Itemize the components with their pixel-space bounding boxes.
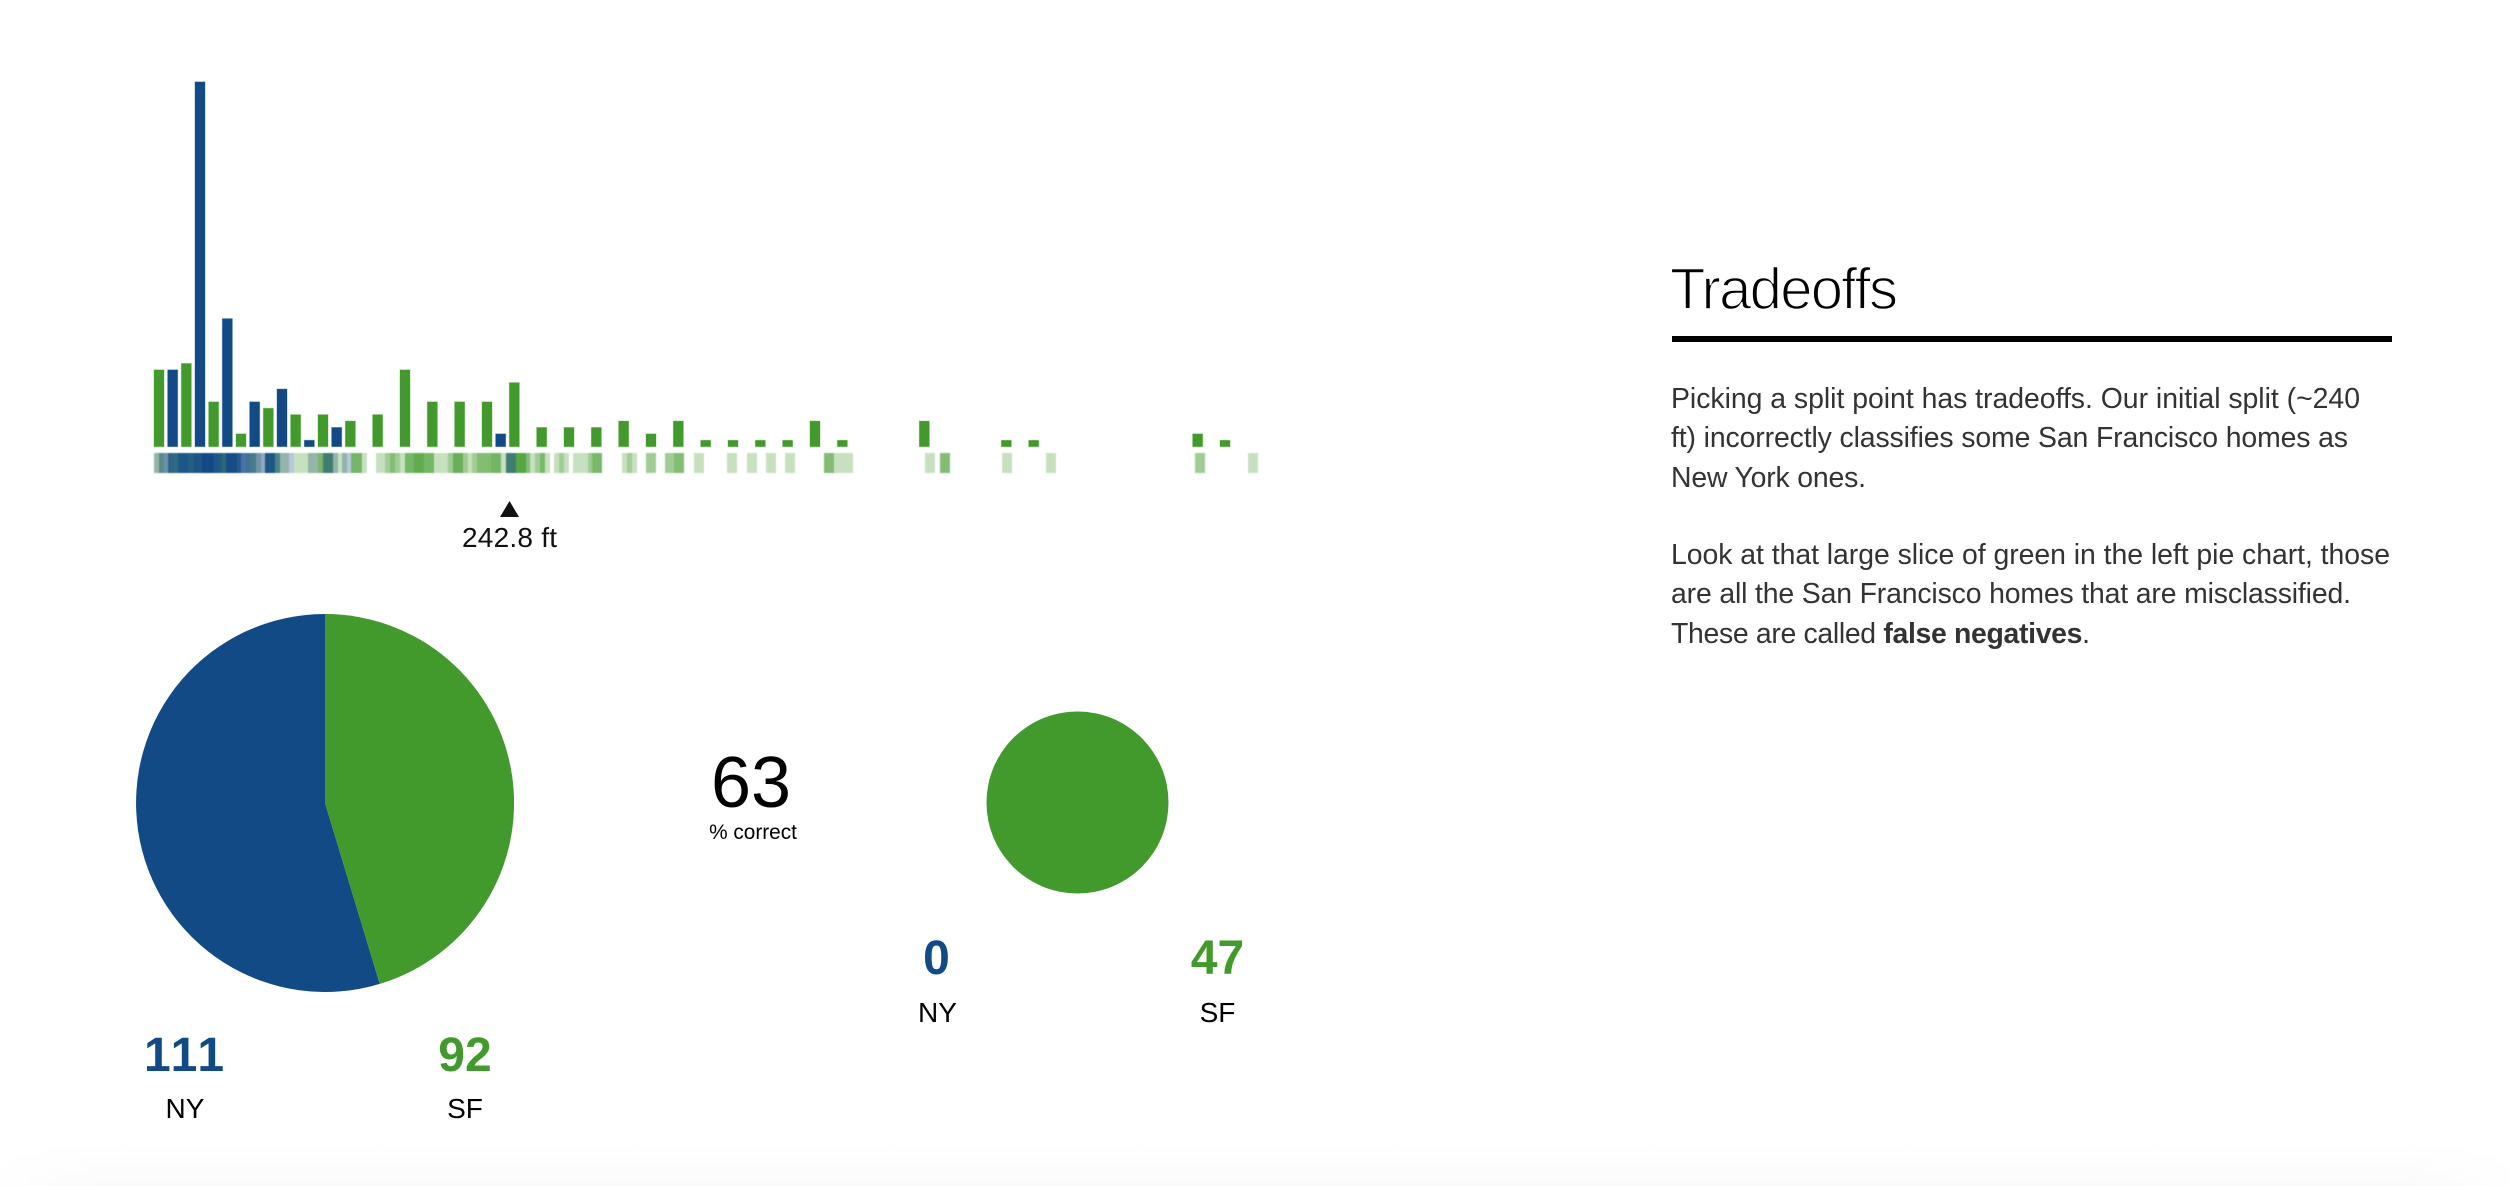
paragraph two xyxy=(1671,539,2390,650)
paragraph one: ft) incorrectly classifies some San Francisco homes as xyxy=(1671,422,2348,454)
histogram bars: homes by elevation xyxy=(154,82,1230,447)
right pie counts xyxy=(918,932,1244,1028)
NY label: NY xyxy=(918,997,957,1028)
paragraph one: New York ones. xyxy=(1671,462,1866,494)
strip plot: individual homes along elevation axis xyxy=(154,453,1258,473)
title rule xyxy=(1672,336,2392,342)
left pie counts xyxy=(144,1029,492,1124)
paragraph one: Picking a split point has tradeoffs. Our initial split (~240 xyxy=(1671,383,2360,415)
SF label: SF xyxy=(447,1093,483,1124)
paragraph two: These are called false negatives. xyxy=(1671,618,2090,650)
text block: explanation xyxy=(1671,383,2390,650)
paragraph two: are all the San Francisco homes that are misclassified. xyxy=(1671,578,2351,610)
right pie chart: above split xyxy=(986,712,1168,894)
SF count: 47 xyxy=(1191,932,1244,985)
SF label: SF xyxy=(1200,997,1235,1028)
title: Tradeoffs xyxy=(1670,257,1898,322)
accuracy readout xyxy=(709,743,797,844)
NY label: NY xyxy=(166,1093,205,1124)
NY count: 0 xyxy=(923,932,950,985)
accuracy value: 63 xyxy=(711,743,791,823)
NY count: 111 xyxy=(144,1029,224,1082)
SF count: 92 xyxy=(438,1029,492,1082)
accuracy caption: % correct xyxy=(709,821,797,844)
left pie chart: below split xyxy=(136,614,514,992)
split point marker xyxy=(462,501,557,553)
split point value: 242.8 ft xyxy=(462,522,557,553)
icon: split point triangle xyxy=(500,501,519,517)
paragraph two: Look at that large slice of green in the left pie chart, those xyxy=(1671,539,2390,571)
paragraph one xyxy=(1671,383,2360,494)
